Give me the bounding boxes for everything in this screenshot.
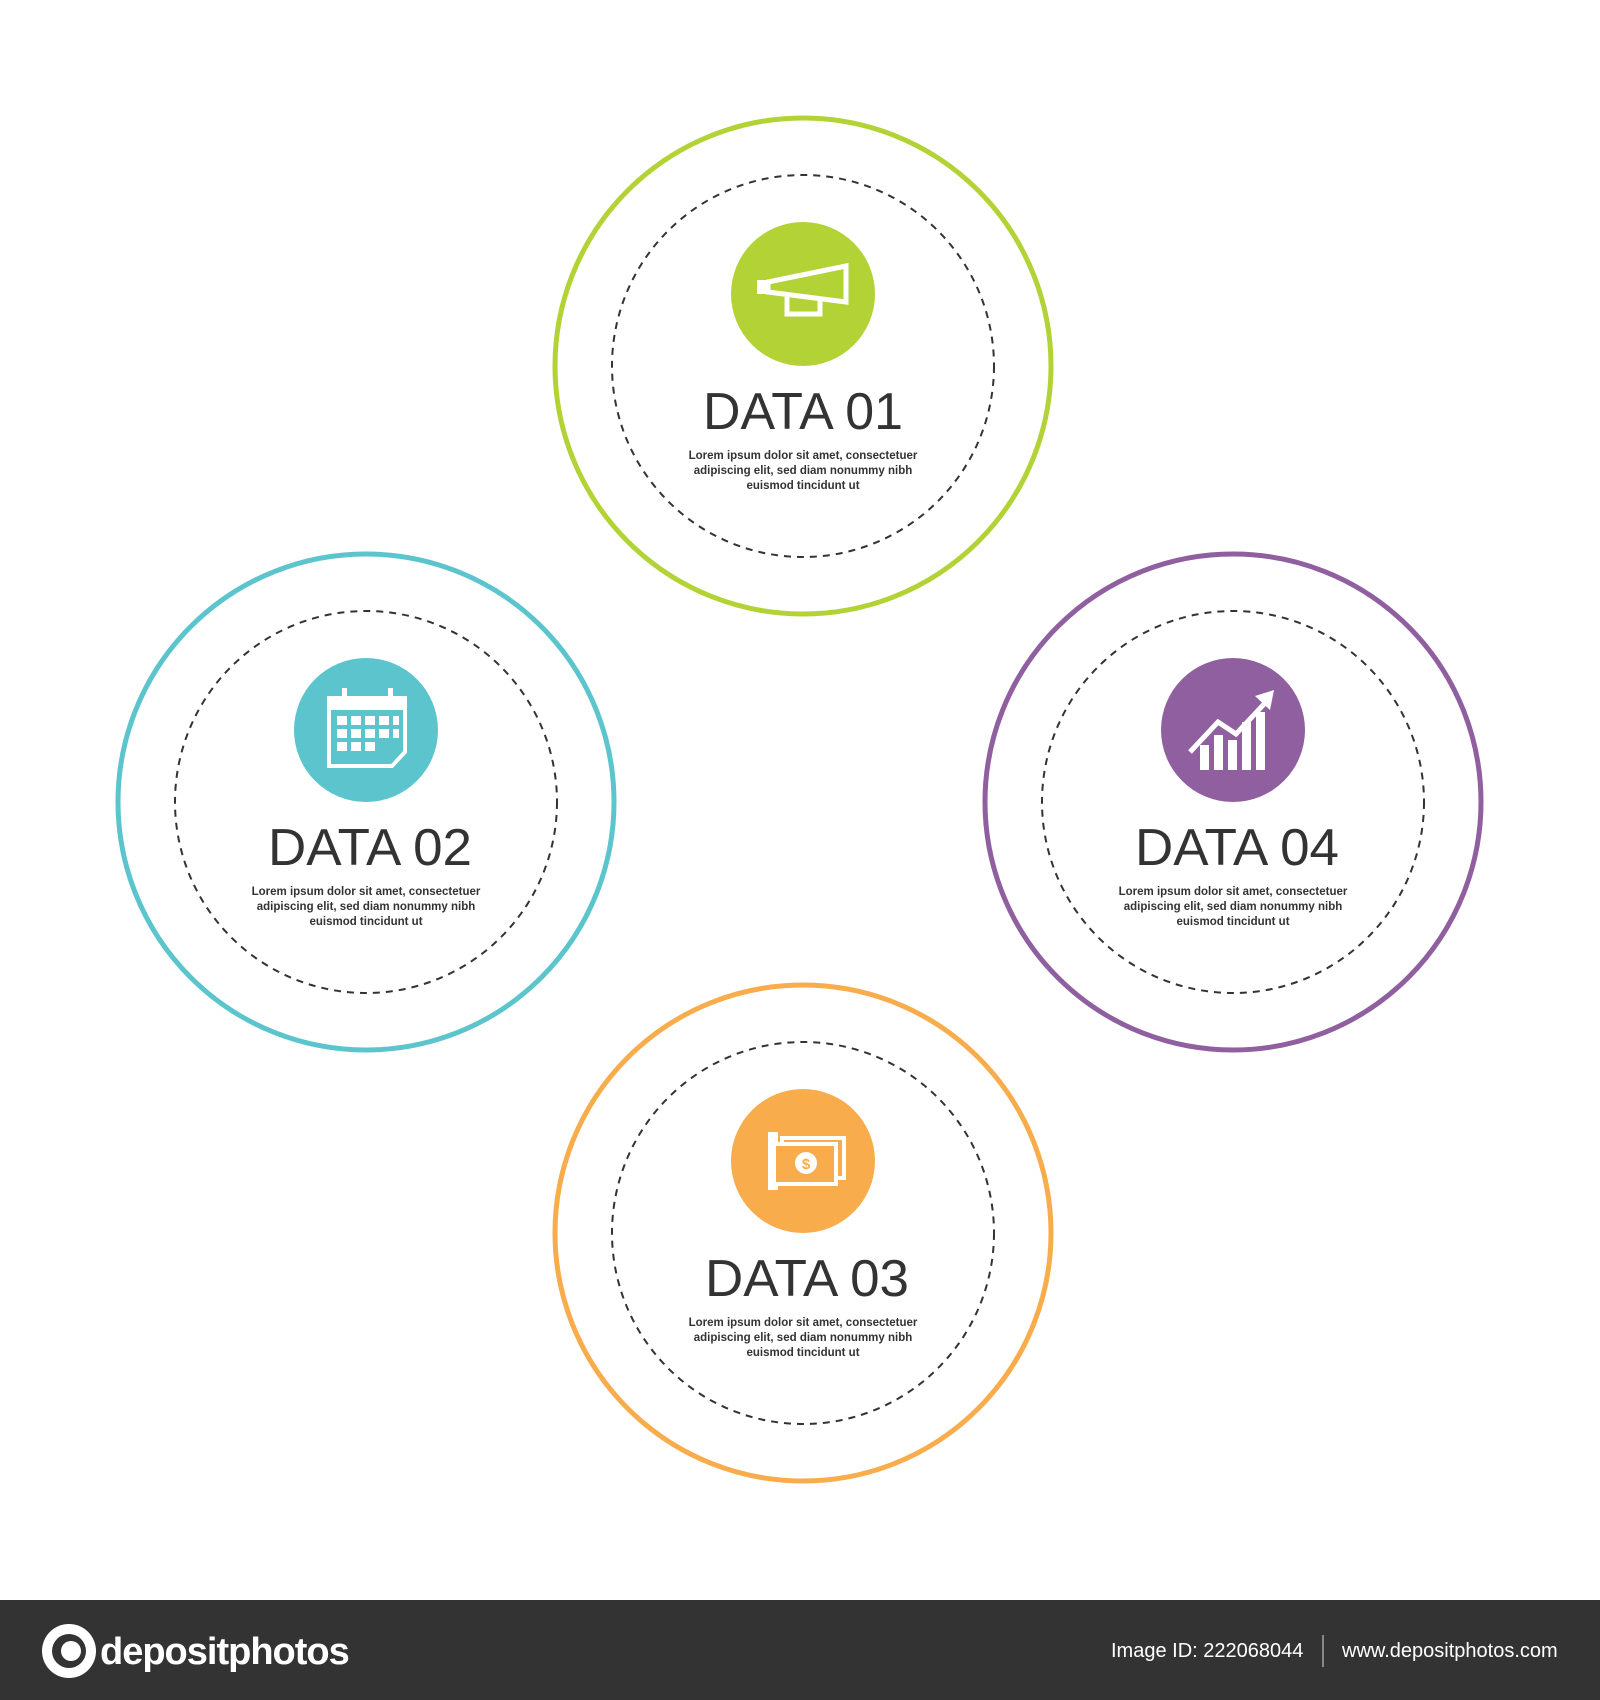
text block: euismod tincidunt ut [309, 916, 423, 928]
image id: Image ID: 222068044 [1111, 1640, 1303, 1662]
text block: adipiscing elit, sed diam nonummy nibh [694, 465, 912, 477]
panel: data 02 [118, 554, 614, 1050]
text block: adipiscing elit, sed diam nonummy nibh [1124, 901, 1342, 913]
icon: growth chart [1161, 658, 1305, 802]
text block: euismod tincidunt ut [1176, 916, 1290, 928]
text block: euismod tincidunt ut [746, 1347, 860, 1359]
heading: DATA 04: DATA 04 [1135, 819, 1339, 877]
icon: money [731, 1089, 875, 1233]
heading: DATA 03: DATA 03 [705, 1250, 909, 1308]
heading: DATA 02: DATA 02 [268, 819, 472, 877]
heading: DATA 01: DATA 01 [703, 383, 903, 441]
text block: adipiscing elit, sed diam nonummy nibh [257, 901, 475, 913]
text block: Lorem ipsum dolor sit amet, consectetuer [689, 450, 918, 462]
icon: logo [42, 1624, 96, 1678]
panel: data 04 [985, 554, 1481, 1050]
panel: data 03 [555, 985, 1051, 1481]
footer [0, 1600, 1600, 1700]
text block: Lorem ipsum dolor sit amet, consectetuer [1119, 886, 1348, 898]
icon: megaphone [731, 222, 875, 366]
text block: adipiscing elit, sed diam nonummy nibh [694, 1332, 912, 1344]
icon: calendar [294, 658, 438, 802]
text block: euismod tincidunt ut [746, 480, 860, 492]
icon: money: $ [802, 1156, 811, 1173]
text block: Lorem ipsum dolor sit amet, consectetuer [252, 886, 481, 898]
logo text: depositphotos [100, 1631, 349, 1673]
text block: Lorem ipsum dolor sit amet, consectetuer [689, 1317, 918, 1329]
url: www.depositphotos.com [1341, 1640, 1558, 1662]
panel: data 01 [555, 118, 1051, 614]
